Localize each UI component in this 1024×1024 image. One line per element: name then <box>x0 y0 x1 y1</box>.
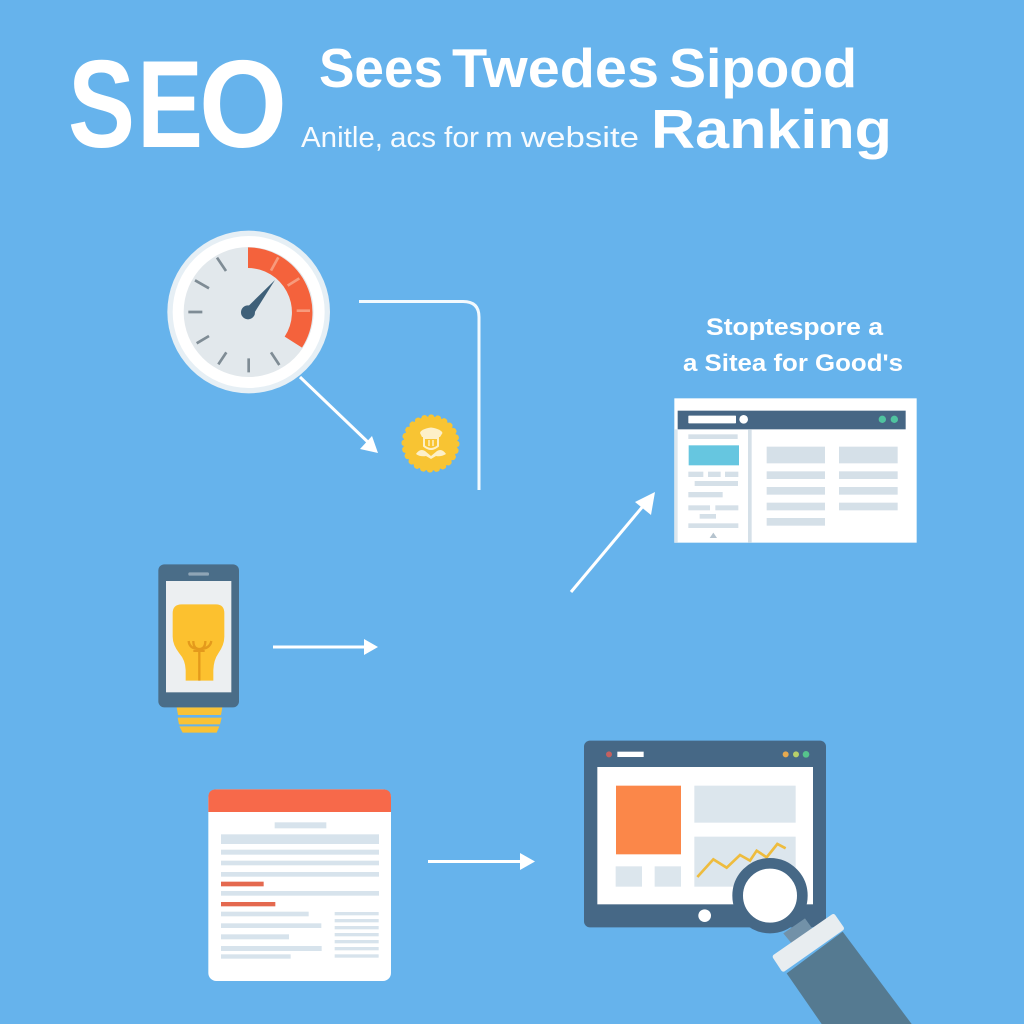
title: Ranking: Ranking <box>651 98 892 160</box>
icon: phone with light bulb <box>158 564 239 733</box>
title: SEO: E <box>137 36 203 174</box>
title: first line <box>319 37 857 99</box>
text: site caption: Stoptespore a <box>706 314 884 341</box>
arrow: to website panel <box>571 492 655 592</box>
title: SEO: O <box>199 36 287 174</box>
title: first line: Sipood <box>669 37 857 99</box>
title: first line: Twedes <box>452 37 659 99</box>
title: SEO: S <box>68 36 135 174</box>
icon: speedometer gauge <box>167 231 330 393</box>
arrow: document to monitor <box>428 853 535 870</box>
monitor frame <box>584 741 826 927</box>
bulb base <box>177 707 222 733</box>
panel: website window <box>674 398 917 543</box>
subtitle: acs <box>390 122 436 154</box>
title: first line: Sees <box>319 37 443 99</box>
screen blocks <box>616 786 681 854</box>
connector line <box>359 302 479 490</box>
text: site caption <box>683 314 903 377</box>
arrow: phone to right <box>273 639 378 655</box>
subtitle: for <box>444 122 479 154</box>
subtitle: Anitle, <box>301 122 383 154</box>
text: site caption: a Sitea for Good's <box>683 350 903 377</box>
title: SEO <box>68 36 287 174</box>
line chart <box>697 844 786 877</box>
arrow: gauge to badge <box>300 377 378 453</box>
magnifier <box>783 918 813 943</box>
subtitle: website <box>520 122 639 154</box>
subtitle: m <box>485 122 513 154</box>
subtitle <box>301 122 639 154</box>
panel: article document <box>208 789 391 981</box>
icon: yellow badge <box>404 416 458 470</box>
title <box>68 36 892 174</box>
icon: monitor with magnifier <box>584 741 912 1024</box>
